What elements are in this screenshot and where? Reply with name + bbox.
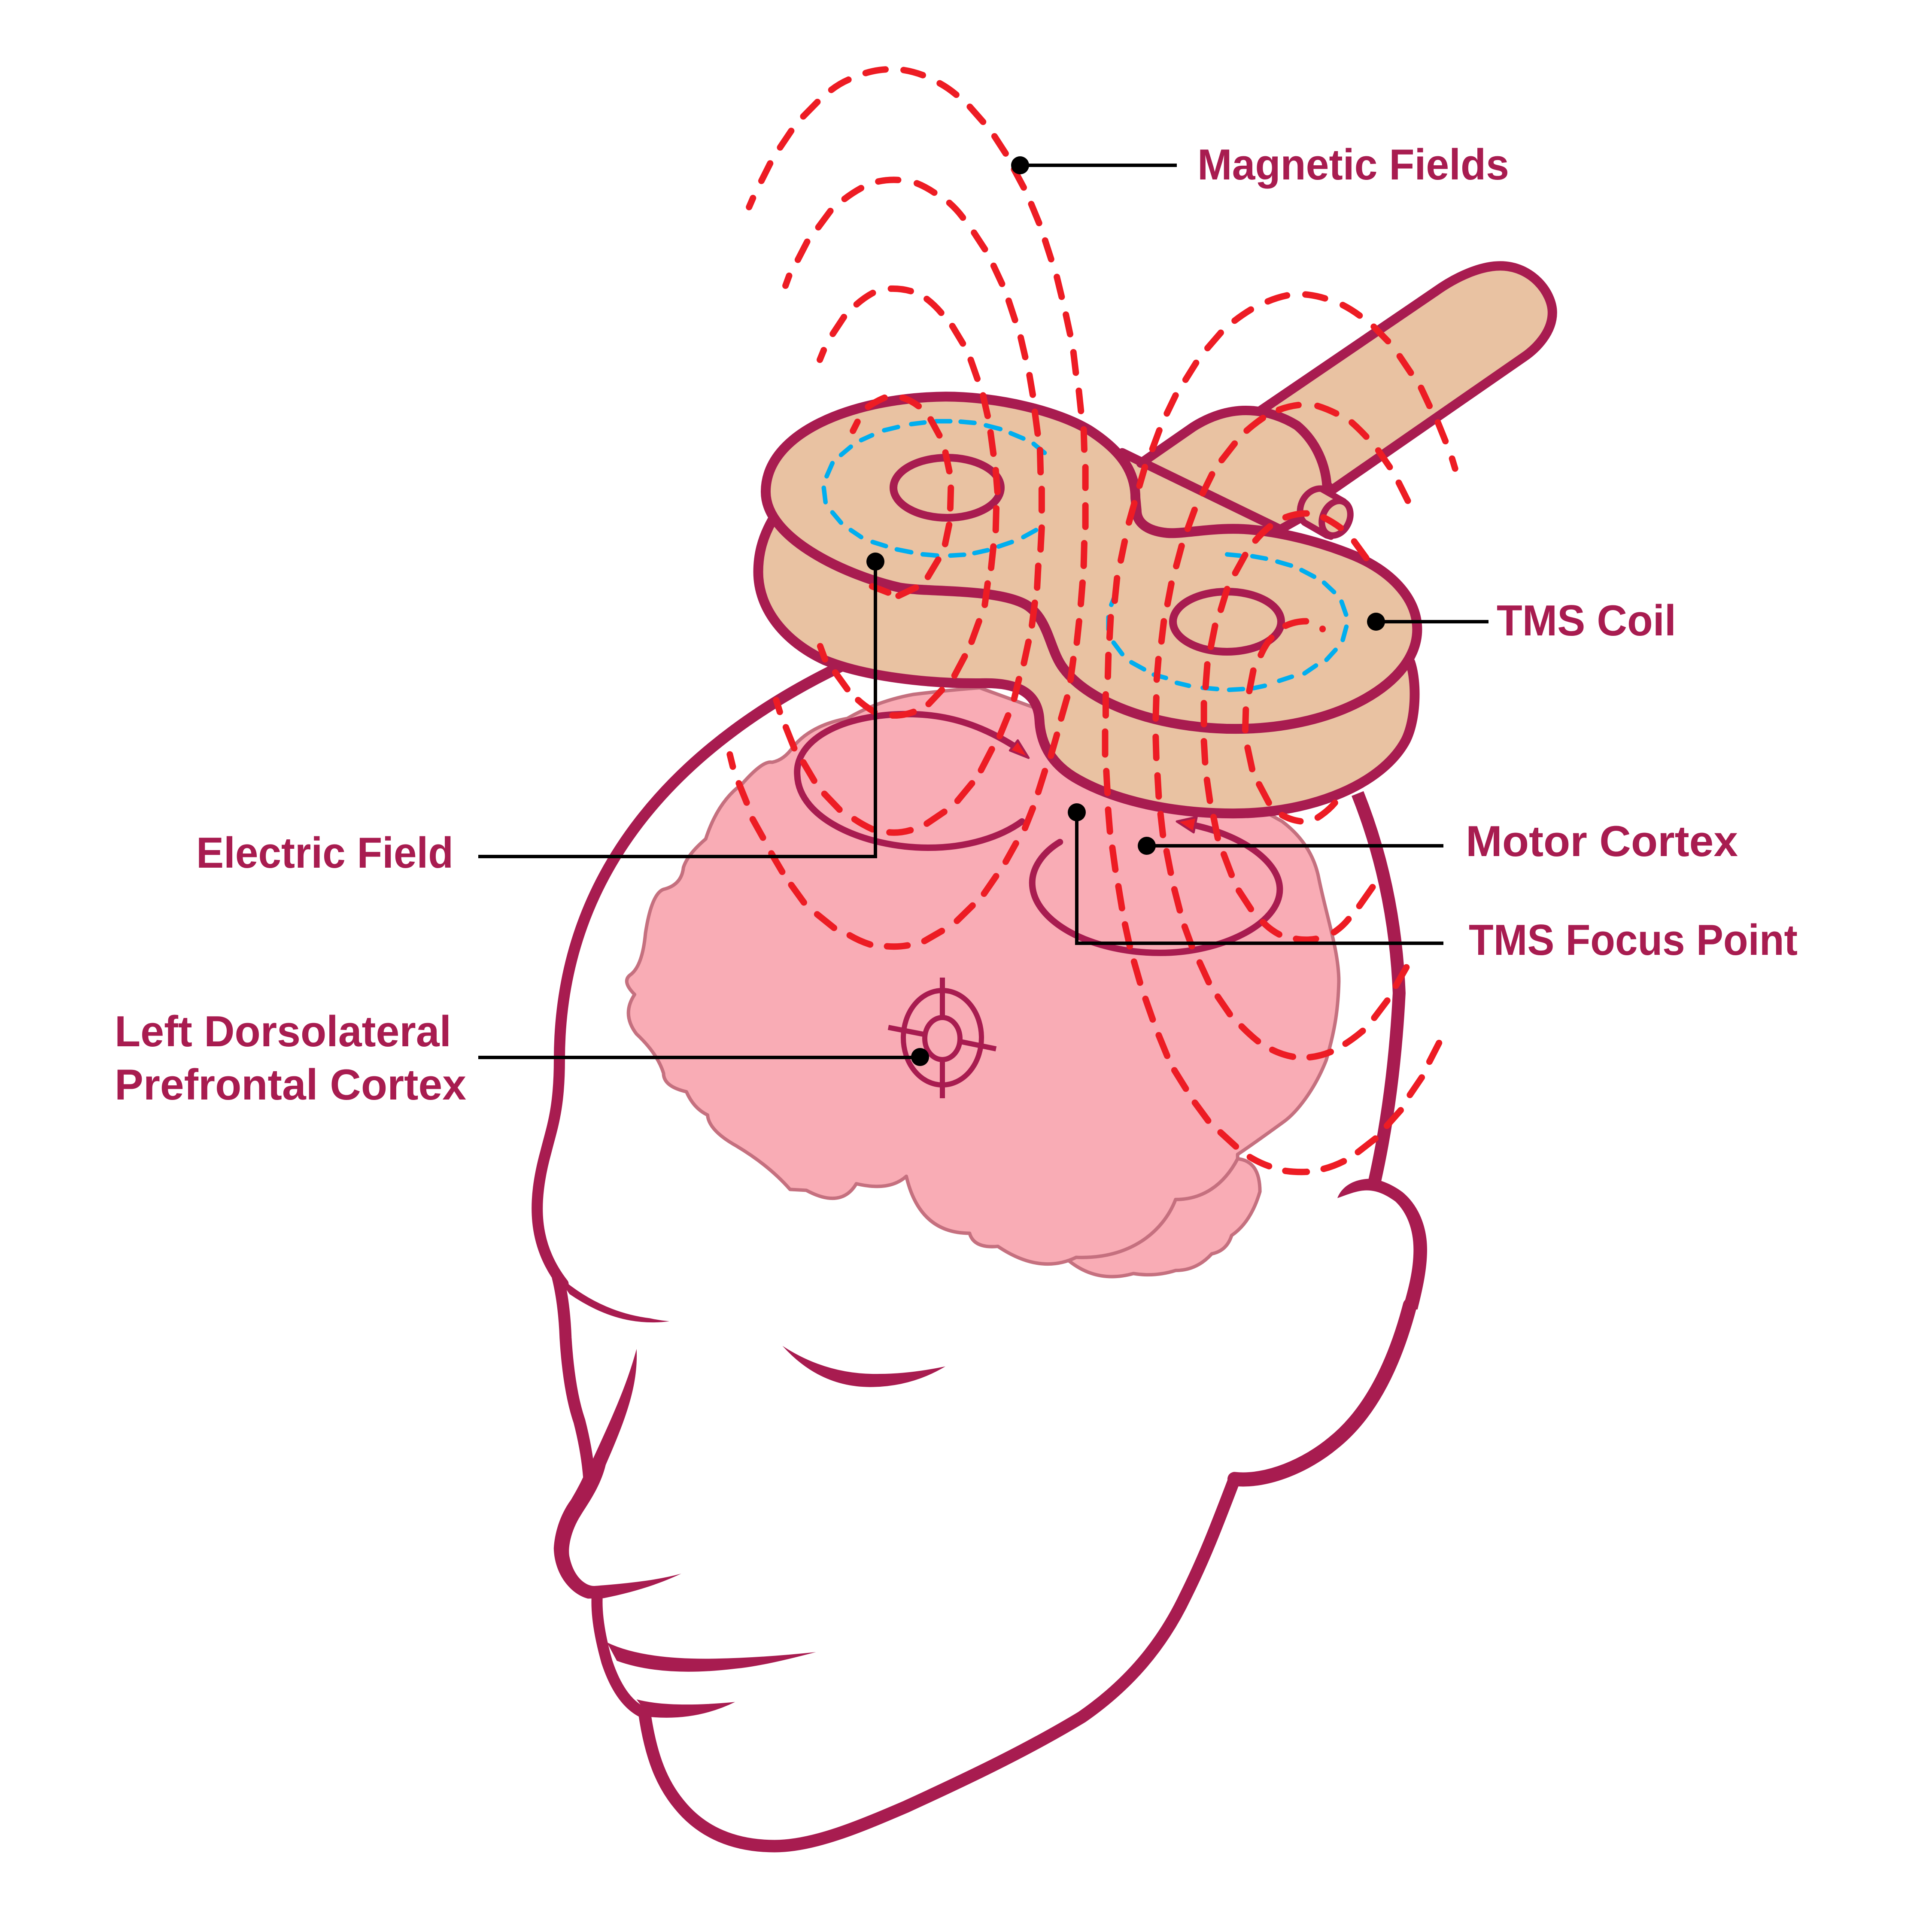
label: electric field: Electric Field <box>196 829 453 877</box>
neck <box>1234 1305 1410 1479</box>
TMS coil <box>758 266 1552 814</box>
right coil centre <box>1173 592 1281 652</box>
ear <box>1337 1179 1427 1309</box>
skull left side <box>537 667 840 1284</box>
leader line: left dorsolateral prefrontal cortex <box>478 1048 929 1066</box>
label: TMS coil: TMS Coil <box>1497 597 1676 645</box>
right field arcs, upper part <box>1121 295 1455 655</box>
nose <box>554 1349 681 1598</box>
housing lower edge <box>1122 453 1304 529</box>
left field arcs, upper part <box>749 70 1081 471</box>
handle housing arch <box>1141 410 1327 492</box>
label: magnetic fields: Magnetic Fields <box>1197 141 1509 189</box>
label: motor cortex: Motor Cortex <box>1466 817 1738 866</box>
left field arcs through brain <box>730 646 1067 947</box>
label: left dorsolateral prefrontal cortex <box>115 1008 466 1109</box>
coil top surface <box>766 397 1417 729</box>
right coil current <box>1227 554 1346 673</box>
right field arcs through coil <box>1108 578 1335 821</box>
leader line: motor cortex <box>1138 837 1443 855</box>
leader line: TMS focus point <box>1068 803 1443 943</box>
coil lower body <box>758 521 1415 814</box>
blue induced current dashes <box>824 421 1346 690</box>
label: left dorsolateral prefrontal cortex: Left Dorsolateral <box>115 1008 451 1056</box>
electric field loops <box>797 714 1280 953</box>
mouth <box>607 1643 816 1672</box>
target icon: dorsolateral prefrontal cortex <box>888 978 996 1098</box>
cable connector <box>1300 489 1344 537</box>
right field arcs, lower part <box>1221 967 1439 1172</box>
chin and jaw <box>644 1479 1234 1846</box>
forehead line <box>558 1276 589 1479</box>
right field arcs through brain <box>1105 694 1373 1121</box>
right loop arrowhead <box>1177 817 1197 832</box>
cerebellum <box>1069 1159 1260 1277</box>
left electric loop <box>797 714 1022 848</box>
left coil current <box>824 421 1045 556</box>
coil handle <box>1261 266 1552 490</box>
left coil centre <box>893 458 1001 518</box>
label: left dorsolateral prefrontal cortex: Prefrontal Cortex <box>115 1061 466 1109</box>
leader line: magnetic fields <box>1011 156 1177 174</box>
cerebrum <box>627 688 1339 1264</box>
head outline <box>537 667 1427 1846</box>
leader line: electric field <box>478 553 884 857</box>
brain <box>627 688 1339 1277</box>
magnetic field dashed lines <box>730 70 1455 1172</box>
leader line: TMS coil <box>1367 613 1488 631</box>
lower lip <box>637 1699 735 1718</box>
left loop arrowhead <box>1010 740 1029 758</box>
handle housing fill <box>1128 410 1327 534</box>
connector opening <box>1316 496 1356 540</box>
eyebrow <box>554 1272 669 1322</box>
label: TMS focus point: TMS Focus Point <box>1469 916 1798 964</box>
closed eye <box>782 1346 945 1387</box>
left field arcs through coil <box>872 395 1085 680</box>
upper lip line <box>597 1596 643 1713</box>
right electric loop <box>1032 826 1280 953</box>
skull right side <box>1358 793 1399 1181</box>
